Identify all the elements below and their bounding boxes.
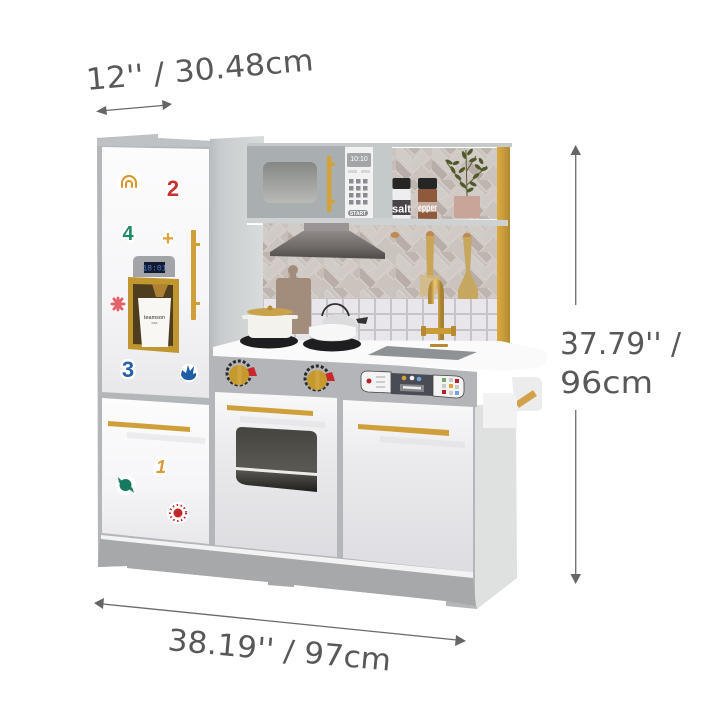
depth arrow: [96, 100, 172, 115]
oven door: [215, 392, 337, 557]
right door handle: [358, 424, 449, 436]
dispenser housing: [128, 277, 179, 353]
peg: [390, 232, 400, 238]
right side panel: [475, 405, 517, 609]
dimension: width: [94, 598, 466, 679]
magnet: blue leaf: [180, 364, 198, 382]
magnet: red sun: [167, 502, 189, 524]
lower left door: [102, 398, 209, 544]
fridge door: [102, 147, 209, 398]
hanging spatula: [458, 233, 478, 299]
microwave keypad panel: 10:10: [350, 156, 368, 163]
microwave window: [263, 162, 317, 203]
magnet: plus: +: [162, 228, 174, 250]
top shelf board: [247, 143, 512, 147]
white pan: [309, 324, 356, 341]
white pot: [242, 306, 298, 338]
magnet: 1: [152, 455, 169, 477]
kettle: [322, 304, 368, 332]
plinth: [98, 538, 476, 606]
width arrow: [94, 598, 466, 646]
lower tiled wall: [263, 223, 497, 303]
oven window: [236, 427, 317, 492]
sink: [368, 346, 477, 360]
width label: 38.19'' / 97cm: [166, 623, 393, 679]
magnet: 4: 4: [122, 223, 134, 245]
centre column: [210, 136, 264, 350]
dimension: height: [560, 145, 682, 584]
back bracket: [512, 377, 542, 411]
fridge magnets: [110, 175, 198, 382]
microwave: [247, 146, 373, 220]
magnet: green candy: [116, 475, 136, 495]
lower left door handle: [108, 421, 190, 432]
faucet: [421, 282, 456, 347]
upper tiled wall: [392, 148, 497, 219]
countertop: [213, 340, 548, 371]
cutting board: [276, 265, 311, 334]
paper cup: [138, 298, 171, 347]
stove panel buttons: [361, 371, 464, 398]
salt jar: salt: [392, 204, 411, 216]
front bracket: [483, 393, 517, 428]
pepper jar: epper: [418, 203, 437, 214]
gold post: [497, 147, 510, 347]
oven handle: [227, 405, 313, 416]
depth label: 12'' / 30.48cm: [85, 43, 315, 98]
microwave body: [247, 146, 345, 219]
fridge handle: [191, 230, 200, 320]
salt jar: [392, 178, 411, 219]
middle shelf: [247, 218, 508, 226]
potted plant: [445, 148, 488, 218]
height label: 37.79'' /: [560, 327, 682, 362]
drink dispenser: KIDS: [152, 322, 158, 325]
dimension: height: 96cm: [560, 366, 653, 401]
top cap of fridge: [97, 134, 212, 147]
magnet: 1: 1: [156, 457, 166, 477]
cabinet body frame: [97, 134, 477, 609]
pepper jar: [418, 178, 437, 219]
right burner: [303, 336, 361, 352]
handle shadows: [127, 416, 465, 448]
magnet: 3: 3: [122, 357, 134, 382]
dimension: depth: [85, 43, 315, 115]
white tile backsplash: [263, 298, 497, 348]
towel rail: [483, 377, 542, 428]
height arrow: [570, 145, 581, 584]
drink dispenser: [128, 256, 179, 353]
shelf interior side: [373, 147, 392, 219]
range hood: [270, 223, 385, 259]
magnet: 2: 2: [167, 176, 179, 201]
towel rod: [517, 393, 535, 405]
microwave keypad panel: START: [350, 211, 366, 217]
left burner: [240, 334, 298, 348]
magnet: arch: [121, 175, 137, 187]
microwave handle: [327, 156, 335, 212]
hanging strainer: [420, 231, 440, 297]
dispenser display: [133, 256, 175, 277]
control knob 1: [227, 361, 257, 385]
drink dispenser: teamson: [144, 315, 165, 321]
microwave keypad panel: [345, 147, 373, 220]
play kitchen: [97, 134, 548, 609]
right cabinet door: [343, 400, 473, 572]
control knob 2: [305, 366, 335, 390]
control strip: [213, 356, 477, 407]
drink dispenser: 18:01: [142, 264, 167, 274]
magnet: flower: [110, 296, 126, 312]
